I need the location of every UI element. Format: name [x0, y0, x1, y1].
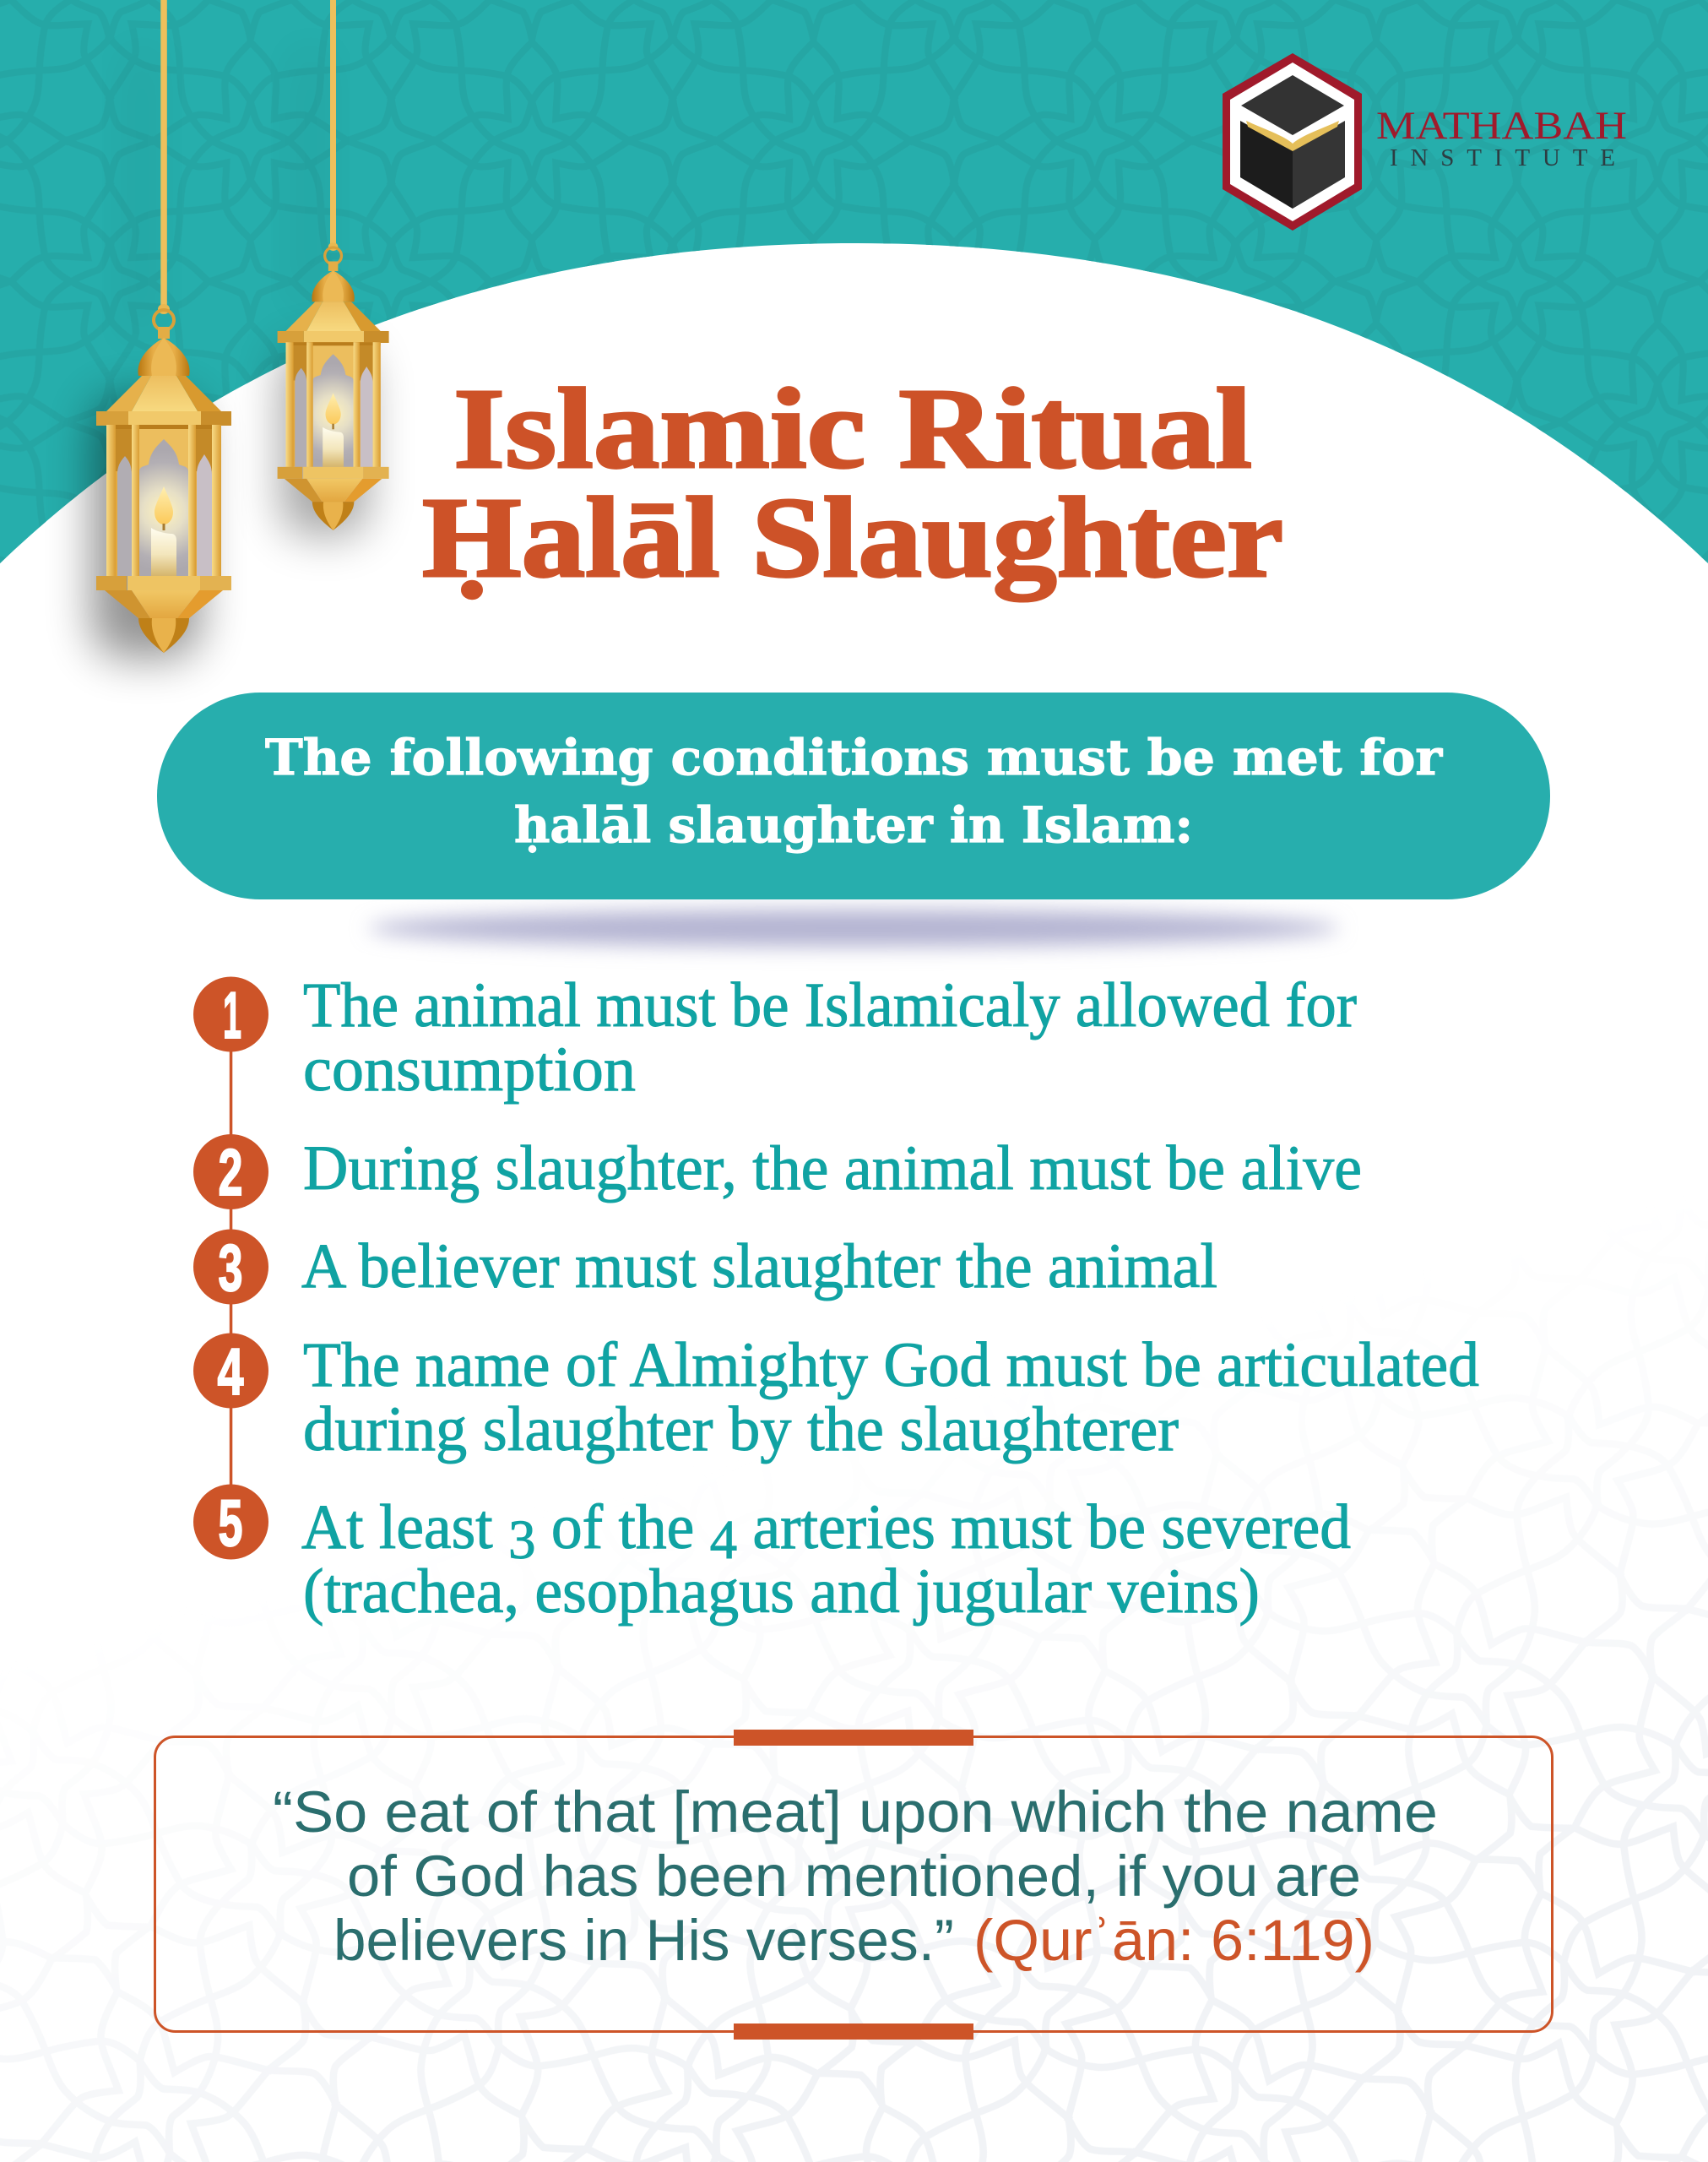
heading text: ḥalāl slaughter in Islam:: [514, 796, 1193, 854]
conditions list text: of the: [535, 1492, 710, 1562]
title: [422, 366, 1283, 601]
conditions list text: The name of Almighty God must be articulated: [303, 1330, 1479, 1400]
heading text: [265, 729, 1443, 854]
logo: Mathabah Institute: [1223, 53, 1627, 231]
panel: quote box: [155, 1730, 1552, 2040]
conditions list text: The animal must be Islamicaly allowed for: [303, 970, 1357, 1040]
icon: large hanging lantern: [91, 0, 231, 659]
marker 4: [193, 1333, 268, 1409]
conditions list text: 3: [508, 1509, 535, 1571]
title: Islamic Ritual: [453, 366, 1252, 492]
quote text: (Qurʾān: 6:119): [973, 1908, 1375, 1973]
conditions list text: arteries must be severed: [737, 1492, 1351, 1562]
conditions list text: 4: [710, 1509, 737, 1571]
conditions list text: during slaughter by the slaughterer: [303, 1394, 1179, 1464]
conditions list text: (trachea, esophagus and jugular veins): [303, 1556, 1260, 1627]
quote text: believers in His verses.”: [333, 1908, 954, 1973]
panel: conditions heading pill: [157, 693, 1550, 899]
title: Ḥalāl Slaughter: [422, 475, 1283, 601]
timeline connector: [230, 1014, 232, 1522]
heading text: The following conditions must be met for: [265, 729, 1443, 786]
bottom faint geometric pattern: [0, 1603, 1708, 2162]
quote text: “So eat of that [meat] upon which the name: [273, 1779, 1438, 1844]
marker 3: [193, 1230, 268, 1305]
marker 1: 1: [223, 978, 241, 1052]
logo sub-wordmark: INSTITUTE: [1390, 144, 1615, 171]
numbered markers: [193, 976, 268, 1560]
conditions list text: [301, 970, 1479, 1627]
marker 4: 4: [218, 1334, 243, 1409]
marker 3: 3: [218, 1230, 243, 1305]
marker 2: 2: [218, 1135, 243, 1209]
marker 1: [193, 976, 268, 1052]
teal header with arched edge: [0, 0, 1708, 563]
conditions list text: A believer must slaughter the animal: [301, 1231, 1217, 1301]
shadow under pill: [368, 910, 1339, 947]
marker 5: [193, 1485, 268, 1560]
quote text: [273, 1779, 1438, 1973]
logo wordmark: MATHABAH: [1376, 104, 1627, 148]
conditions list text: At least: [301, 1492, 496, 1562]
quote text: of God has been mentioned, if you are: [347, 1844, 1361, 1909]
icon: small hanging lantern: [278, 0, 389, 536]
conditions list text: consumption: [303, 1035, 636, 1105]
conditions list text: During slaughter, the animal must be alive: [303, 1133, 1362, 1203]
marker 5: 5: [218, 1486, 243, 1560]
icon: kaaba hexagon: [1223, 53, 1362, 231]
marker 2: [193, 1134, 268, 1209]
